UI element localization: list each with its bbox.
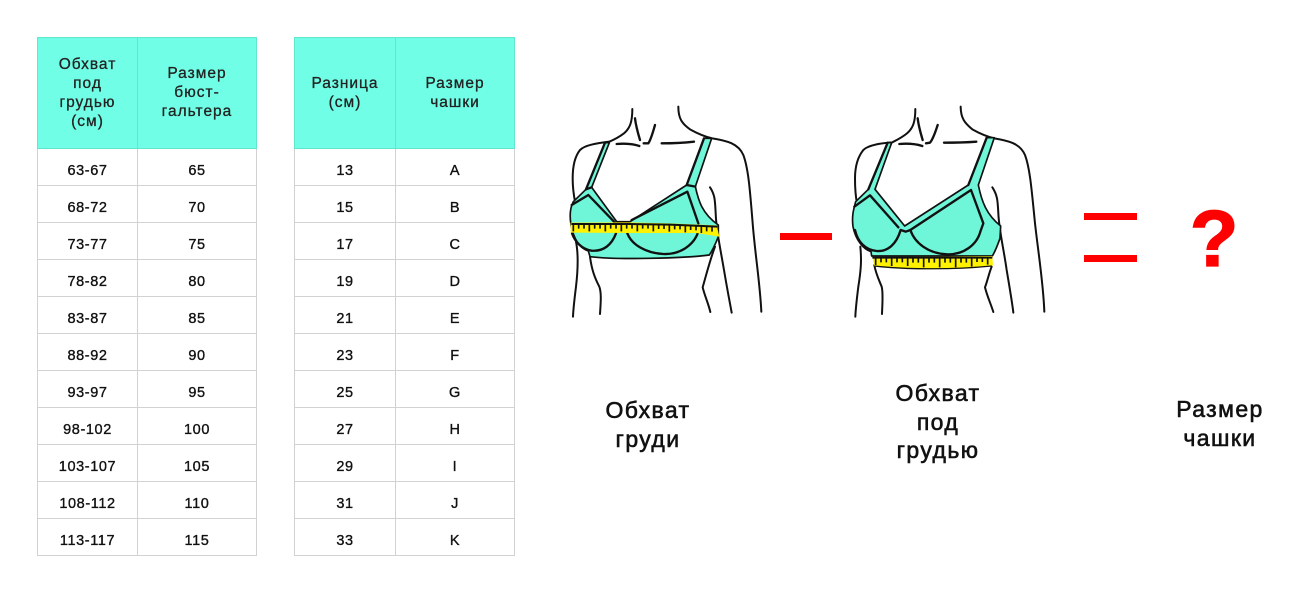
table: band size: 98-102 [63, 422, 112, 438]
label: underbust [896, 380, 980, 464]
measuring tape [872, 256, 993, 269]
table: band size: 93-97 [67, 384, 108, 400]
table: band size: 85 [188, 310, 206, 326]
table: band size: 113-117 [60, 532, 115, 548]
table: cup size: чашки [430, 94, 480, 111]
table: cup size: J [451, 496, 459, 512]
table: cup size: 31 [336, 496, 354, 512]
table: cup size: Разница [311, 75, 379, 92]
table: cup size: 23 [336, 348, 354, 364]
table: band size: 88-92 [67, 348, 108, 364]
table: band size: 90 [188, 348, 206, 364]
bra shape [853, 138, 1001, 256]
table: band size: бюст- [174, 84, 220, 101]
table: band size: 75 [188, 236, 206, 252]
table: band size: Размер [167, 65, 227, 82]
table: cup size: 29 [336, 458, 354, 474]
table: cup size: H [449, 422, 461, 438]
table: cup size: 27 [336, 422, 354, 438]
table: band size: 115 [185, 532, 209, 548]
table: cup size: D [449, 274, 461, 290]
table: band size: под [73, 74, 102, 92]
table: cup size: 33 [336, 532, 354, 548]
label: bust: Обхват [606, 397, 690, 423]
bra shape [570, 138, 718, 258]
question mark: ? [1190, 194, 1238, 283]
table: band size: гальтера [162, 103, 232, 120]
table: cup size: 15 [336, 200, 354, 216]
label: cup size [1176, 396, 1264, 450]
table: band size: 110 [185, 496, 209, 512]
label: cup size: Размер [1176, 396, 1264, 422]
illustration: bust measurement [569, 106, 762, 318]
table: band size: 103-107 [59, 458, 116, 474]
table: cup size: E [450, 310, 460, 326]
table: cup size: G [449, 384, 461, 400]
table: band size: 65 [188, 162, 206, 178]
label: underbust: грудью [897, 437, 979, 463]
table: band size: грудью [59, 94, 116, 110]
label: cup size: чашки [1183, 424, 1257, 450]
table: cup size: F [450, 348, 460, 364]
table: band size: 95 [188, 384, 206, 400]
table: band size: 68-72 [67, 200, 108, 216]
table: band size: Обхват [59, 56, 116, 72]
label: underbust: Обхват [896, 380, 980, 406]
table: cup size: 13 [336, 162, 354, 178]
illustration: underbust measurement [852, 106, 1046, 318]
table: band size: 83-87 [67, 310, 108, 326]
table: cup size: A [450, 162, 460, 178]
table: cup size [294, 37, 515, 556]
table: band size: 70 [188, 200, 206, 216]
minus sign [780, 233, 832, 240]
label: bust: груди [616, 426, 680, 452]
table: band size: 63-67 [67, 162, 108, 178]
table: cup size: I [453, 458, 457, 474]
table: cup size: 19 [336, 274, 354, 290]
table: band size: 108-112 [59, 496, 116, 512]
table: cup size: B [450, 200, 460, 216]
table: band size: 80 [188, 274, 206, 290]
table: band size: 105 [184, 458, 210, 474]
label: bust [606, 397, 690, 452]
table: band size: 100 [184, 422, 210, 438]
equals sign [1084, 213, 1137, 262]
table: cup size: (см) [329, 94, 361, 111]
measuring tape [571, 222, 719, 237]
table: cup size: C [449, 236, 461, 252]
table: band size: 78-82 [67, 274, 108, 290]
table: cup size: K [450, 532, 460, 548]
table: cup size: Размер [425, 75, 485, 92]
table: band size: (см) [71, 112, 104, 130]
table: band size [37, 37, 257, 556]
table: cup size: 21 [336, 310, 354, 326]
label: underbust: под [917, 408, 959, 434]
table: band size: 73-77 [67, 236, 108, 252]
table: cup size: 17 [336, 236, 354, 252]
table: cup size: 25 [336, 384, 354, 400]
